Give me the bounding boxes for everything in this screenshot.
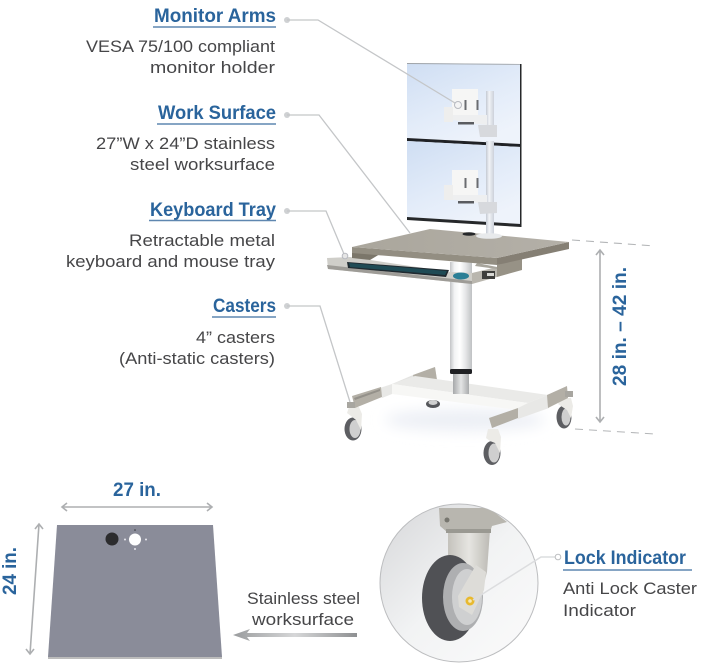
label: monitor arms: VESA 75/100 compliant [86,37,275,56]
upper monitor [407,63,522,147]
label: casters: 4” casters [196,328,275,347]
label: casters [119,295,350,402]
stainless steel plate [48,525,222,659]
callout: stainless steel worksurface [233,589,360,641]
label: lock indicator: Lock Indicator [564,547,686,569]
callout: stainless steel worksurface: Stainless steel [247,589,360,608]
label: lock indicator [473,547,697,620]
label: work surface: Work Surface [158,102,276,124]
label: casters: Casters [213,295,276,317]
callout: stainless steel worksurface: worksurface [251,610,354,629]
floor shadow [385,409,545,431]
lower monitor [407,141,522,233]
column [450,262,472,394]
label: monitor arms: monitor holder [150,58,275,77]
label: lock indicator: Anti Lock Caster [563,579,697,598]
keyboard tray [327,252,522,284]
width dimension [62,479,212,511]
width dimension: 27 in. [113,479,161,501]
monitor base mount [476,227,502,239]
label: keyboard tray: keyboard and mouse tray [66,252,276,271]
label: keyboard tray: Keyboard Tray [150,199,276,221]
height dimension [572,240,655,434]
casters [344,398,573,465]
label: lock indicator: Indicator [563,601,636,620]
depth dimension [0,524,43,654]
label: work surface [96,102,410,233]
label: monitor arms [86,5,462,108]
work surface [352,229,569,265]
label: work surface: steel worksurface [130,155,275,174]
label: work surface: 27”W x 24”D stainless [96,134,275,153]
label: monitor arms: Monitor Arms [154,5,276,27]
label: casters: (Anti-static casters) [119,349,275,368]
workstation cart [327,63,573,465]
base frame [347,367,573,428]
label: keyboard tray [66,199,348,271]
height dimension: 28 in. – 42 in. [609,267,631,386]
caster close-up circle [380,504,538,662]
label: keyboard tray: Retractable metal [129,231,275,250]
